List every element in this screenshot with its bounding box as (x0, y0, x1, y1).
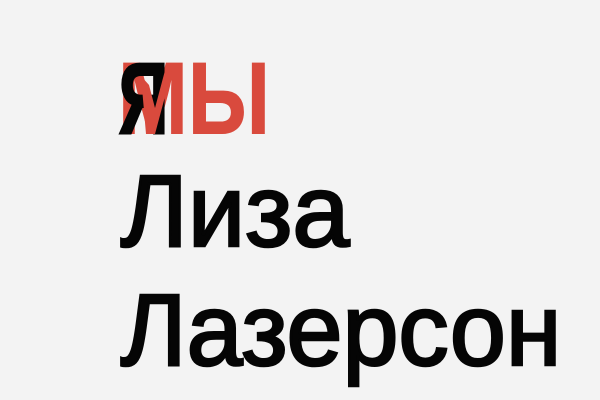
heading: МЫ with overlapping Я (118, 42, 270, 156)
red word МЫ: МЫ (118, 42, 270, 156)
black letter Я: Я (118, 43, 168, 155)
red diagonal of М over Я (141, 63, 174, 134)
name: Лиза: Лиза (120, 154, 350, 268)
surname: Лазерсон: Лазерсон (120, 273, 562, 387)
